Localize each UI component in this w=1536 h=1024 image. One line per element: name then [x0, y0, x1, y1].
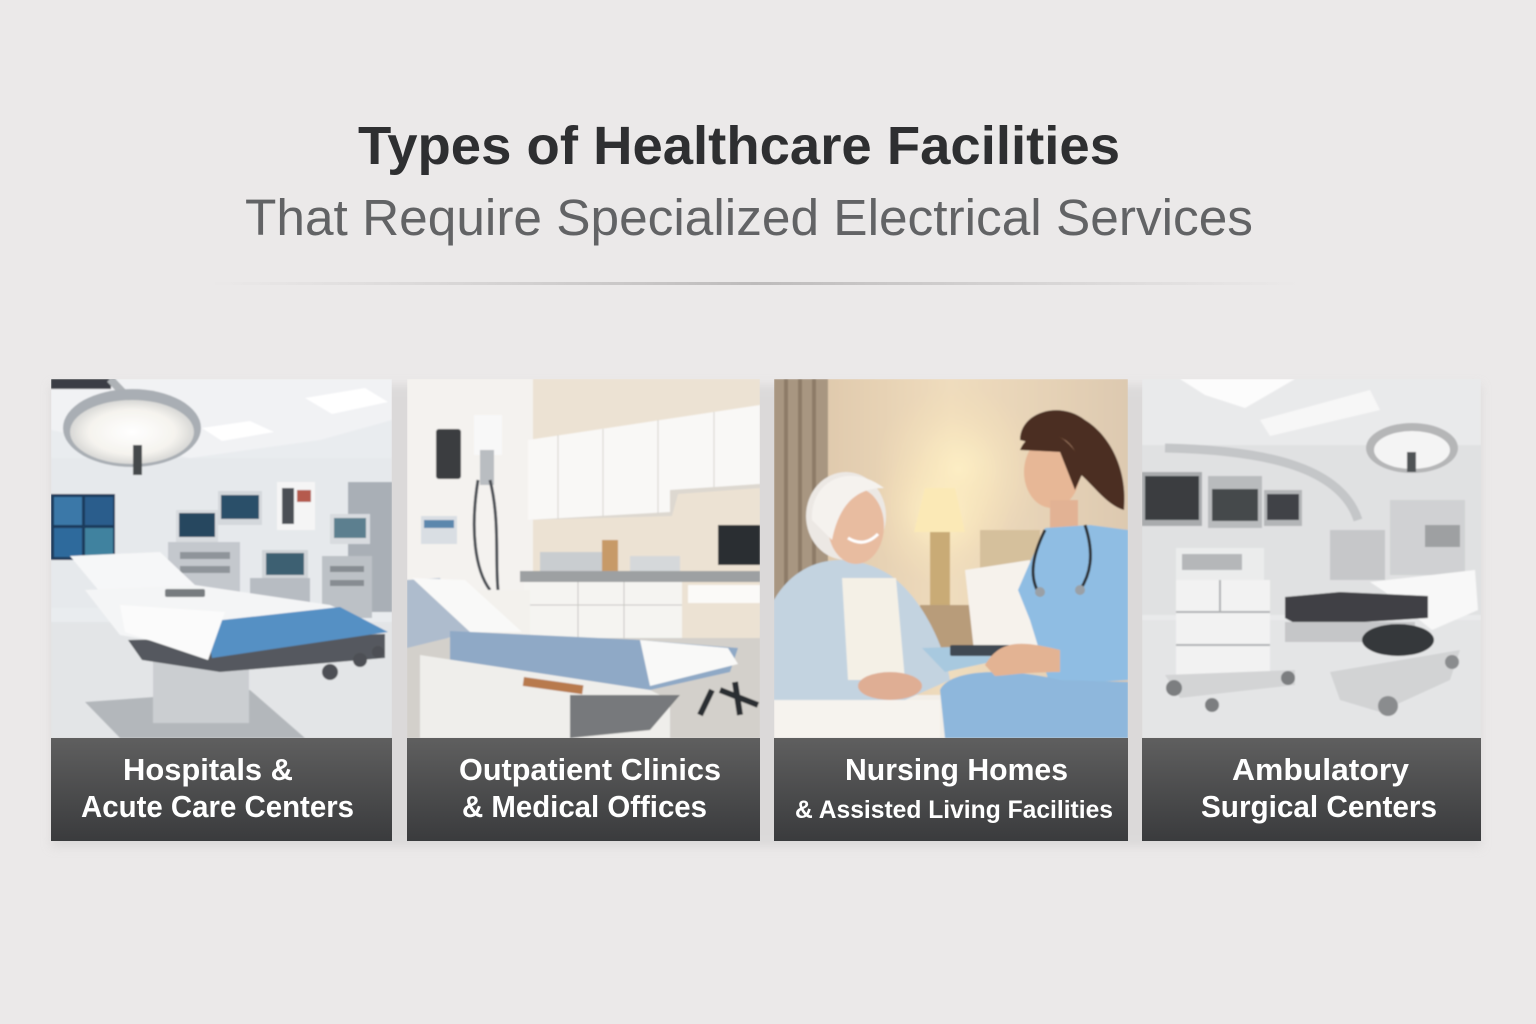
label text: Nursing Homes: [845, 752, 1068, 787]
label text: Hospitals &: [123, 752, 293, 787]
label bar: [407, 738, 760, 841]
title: Types of Healthcare Facilities: [358, 116, 1120, 176]
subtitle: That Require Specialized Electrical Services: [245, 189, 1253, 246]
panel: nursing homes: [774, 379, 1128, 841]
label text: Ambulatory: [1232, 752, 1410, 787]
photo: operating room with blue bed: [51, 379, 392, 738]
photo: nurse with elderly resident: [774, 379, 1128, 738]
panel: outpatient clinics: [407, 379, 760, 841]
label bar: [1142, 738, 1481, 841]
panel: hospitals: [51, 379, 392, 841]
photo: grayscale surgical suite: [1142, 379, 1481, 738]
photo: exam room with cabinets: [407, 379, 760, 738]
label text: & Medical Offices: [462, 789, 707, 824]
label text: Outpatient Clinics: [459, 752, 721, 787]
label bar: [51, 738, 392, 841]
label text: Acute Care Centers: [81, 789, 354, 824]
label bar: [774, 738, 1128, 841]
panel: ambulatory surgical centers: [1142, 379, 1481, 841]
label text: & Assisted Living Facilities: [795, 796, 1113, 824]
label text: Surgical Centers: [1201, 789, 1437, 824]
